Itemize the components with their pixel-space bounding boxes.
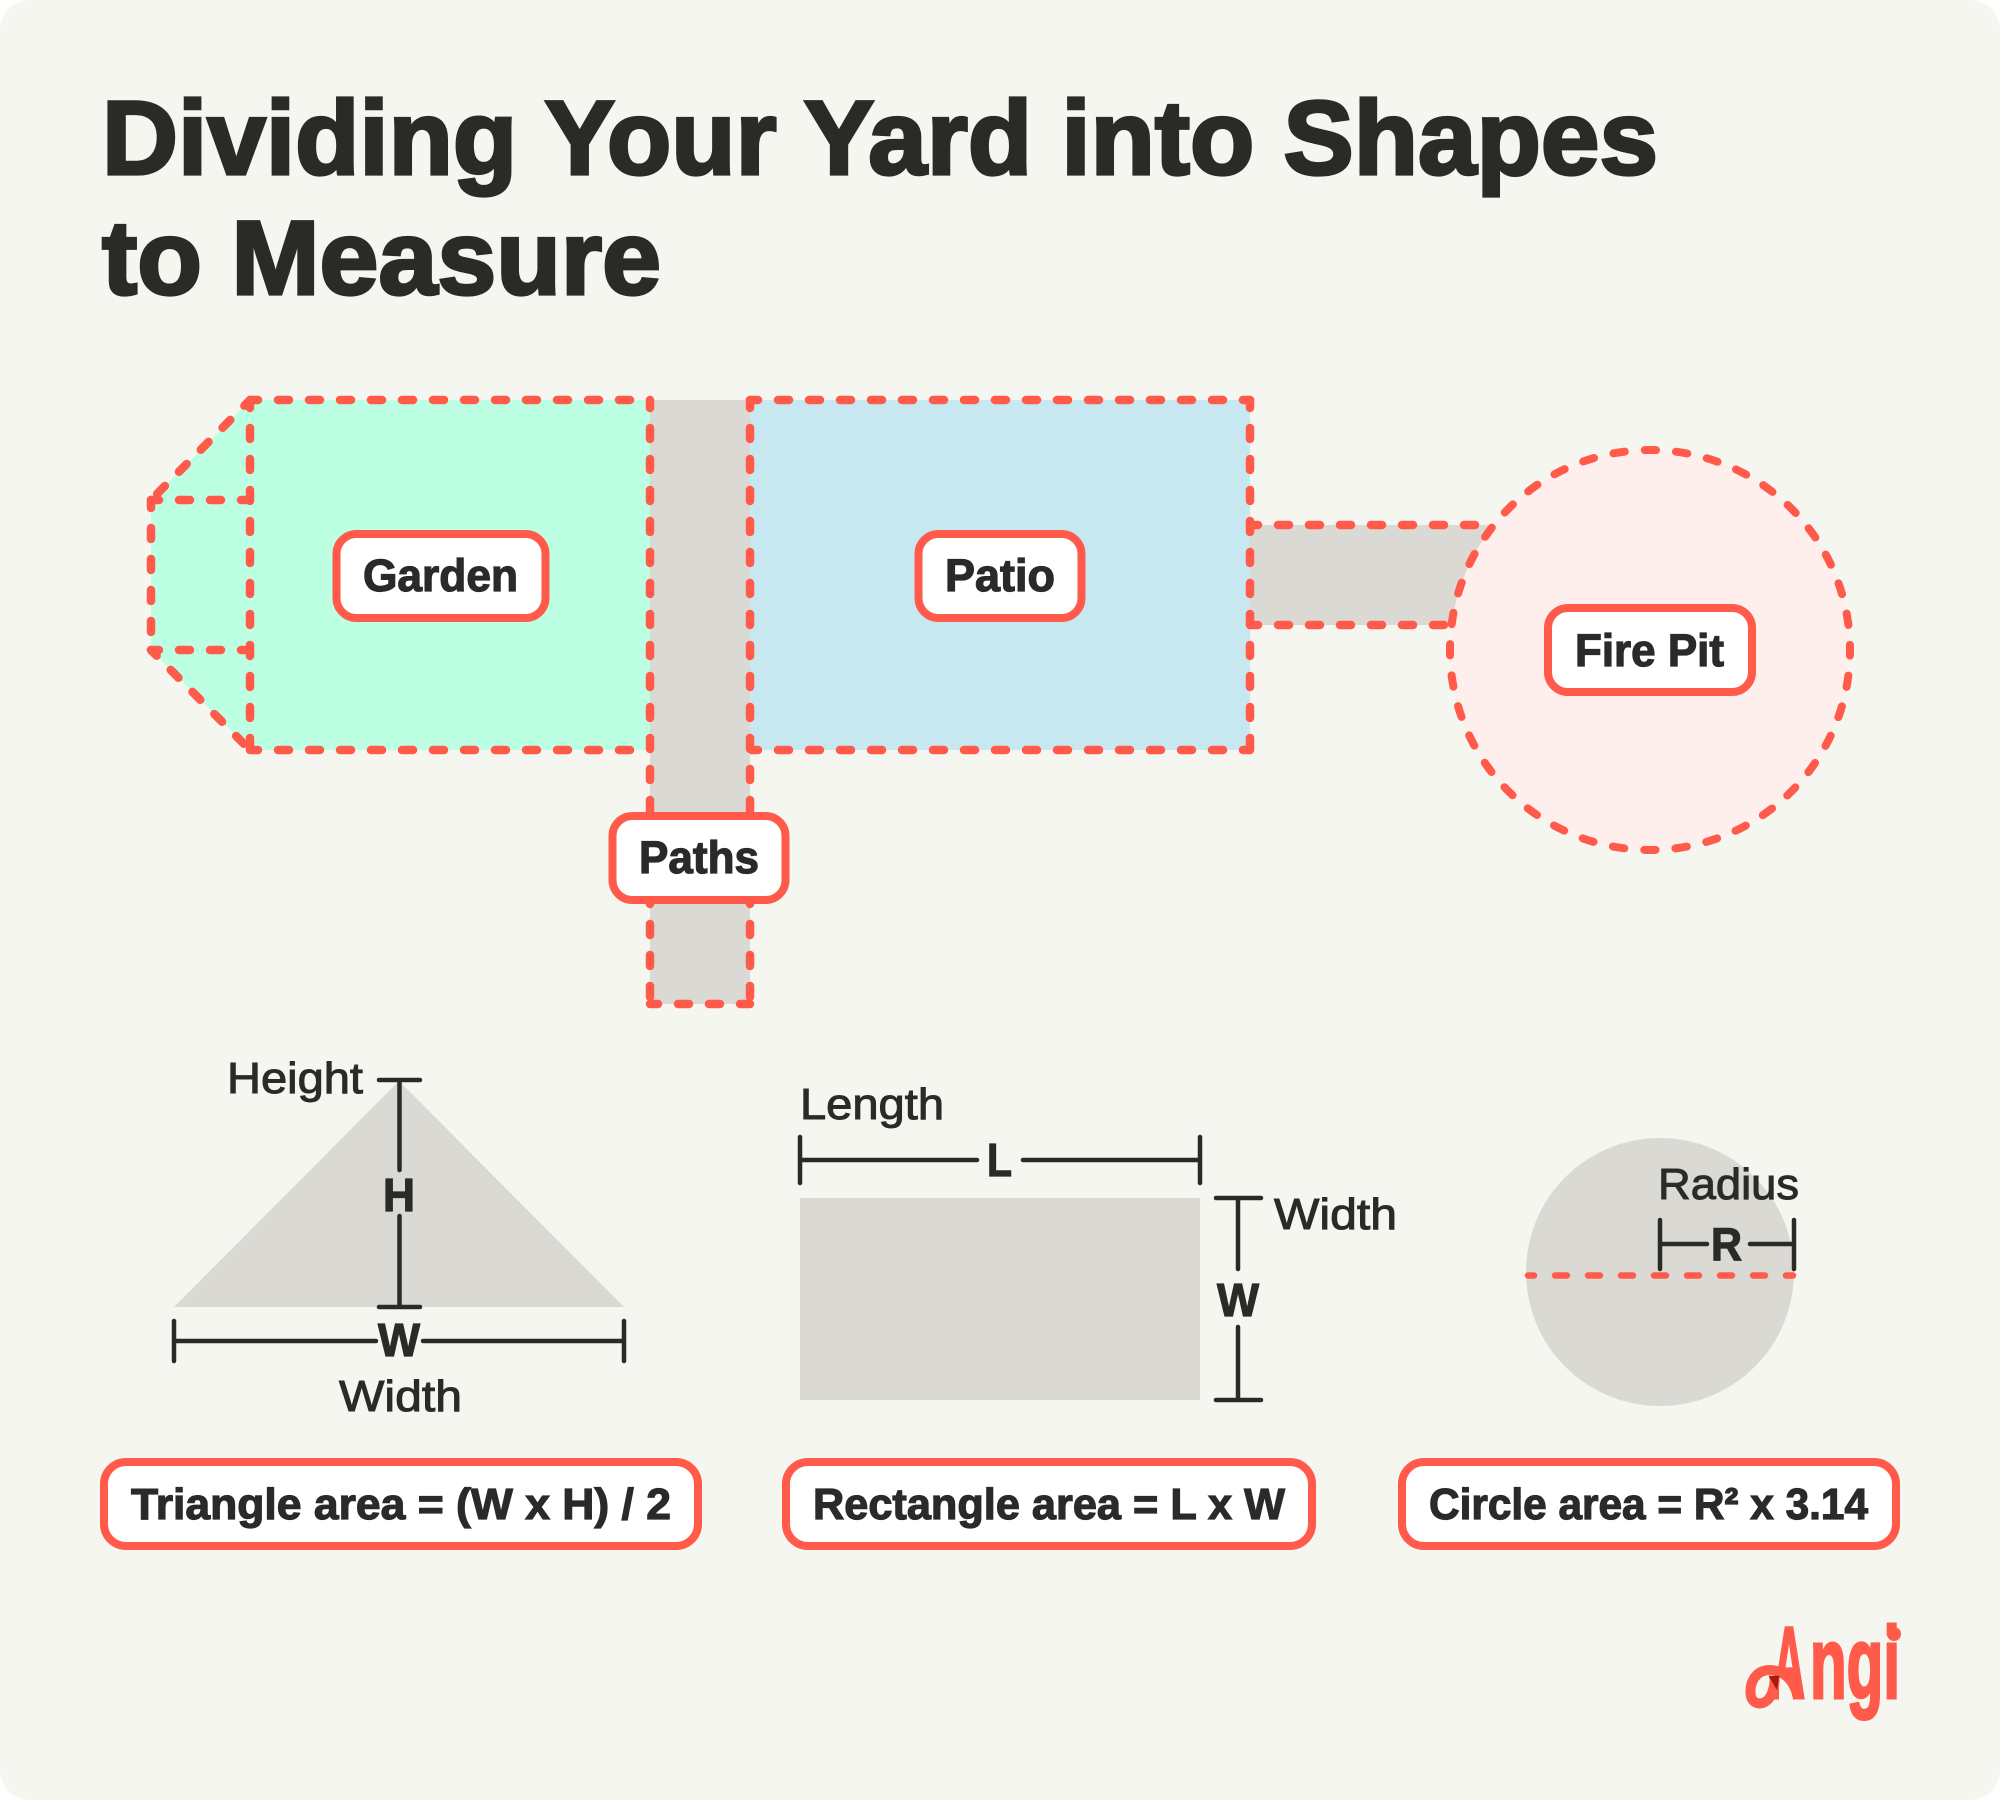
vertical path xyxy=(650,400,750,1004)
width measure: W xyxy=(378,1314,421,1366)
label: Garden xyxy=(336,534,546,618)
label: Patio: Patio xyxy=(945,550,1055,601)
circle shape xyxy=(1526,1138,1794,1406)
width measure: W xyxy=(1217,1274,1260,1326)
height measure: Height xyxy=(227,1054,363,1103)
title xyxy=(102,80,1658,317)
width measure xyxy=(174,1314,624,1421)
formula: triangle xyxy=(104,1462,698,1546)
Angi logo: ngi xyxy=(1810,1606,1900,1720)
patio right edge xyxy=(1246,400,1254,750)
radius label: Radius xyxy=(1658,1160,1799,1209)
length measure: Length xyxy=(800,1080,944,1129)
label: Patio xyxy=(918,534,1082,618)
width measure: Width xyxy=(1274,1190,1397,1239)
length measure: L xyxy=(987,1134,1012,1186)
formula: circle: Circle area = R² x 3.14 xyxy=(1429,1480,1868,1529)
circle diagram xyxy=(1526,1138,1799,1406)
radius measure: R xyxy=(1711,1218,1742,1270)
radius measure xyxy=(1660,1218,1794,1270)
width measure: Width xyxy=(339,1372,462,1421)
width measure xyxy=(1216,1190,1397,1400)
height measure: H xyxy=(383,1169,415,1221)
label: Fire Pit: Fire Pit xyxy=(1575,625,1724,676)
length measure xyxy=(800,1080,1200,1186)
label: Garden: Garden xyxy=(363,550,518,601)
rectangle shape xyxy=(800,1198,1200,1400)
label: Paths: Paths xyxy=(639,832,759,883)
connector path to fire pit xyxy=(1250,525,1510,625)
title: Dividing Your Yard into Shapes xyxy=(102,80,1658,197)
Angi logo xyxy=(1750,1606,1901,1720)
formula: rectangle: Rectangle area = L x W xyxy=(813,1480,1285,1529)
patio area xyxy=(750,400,1250,750)
diameter dashed line xyxy=(1528,1272,1793,1279)
yard diagram xyxy=(151,400,1850,1004)
formula: rectangle xyxy=(786,1462,1312,1546)
triangle diagram xyxy=(174,1054,624,1421)
garden area xyxy=(151,400,650,750)
rectangle diagram xyxy=(800,1080,1397,1400)
title: to Measure xyxy=(102,200,661,317)
Angi logo: A xyxy=(1773,1606,1805,1720)
label: Fire Pit xyxy=(1548,608,1752,692)
label: Paths xyxy=(612,816,786,900)
formula: circle xyxy=(1402,1462,1896,1546)
height measure xyxy=(227,1054,420,1307)
fire pit circle xyxy=(1450,450,1850,850)
formula: triangle: Triangle area = (W x H) / 2 xyxy=(131,1480,671,1529)
triangle shape xyxy=(174,1081,624,1307)
